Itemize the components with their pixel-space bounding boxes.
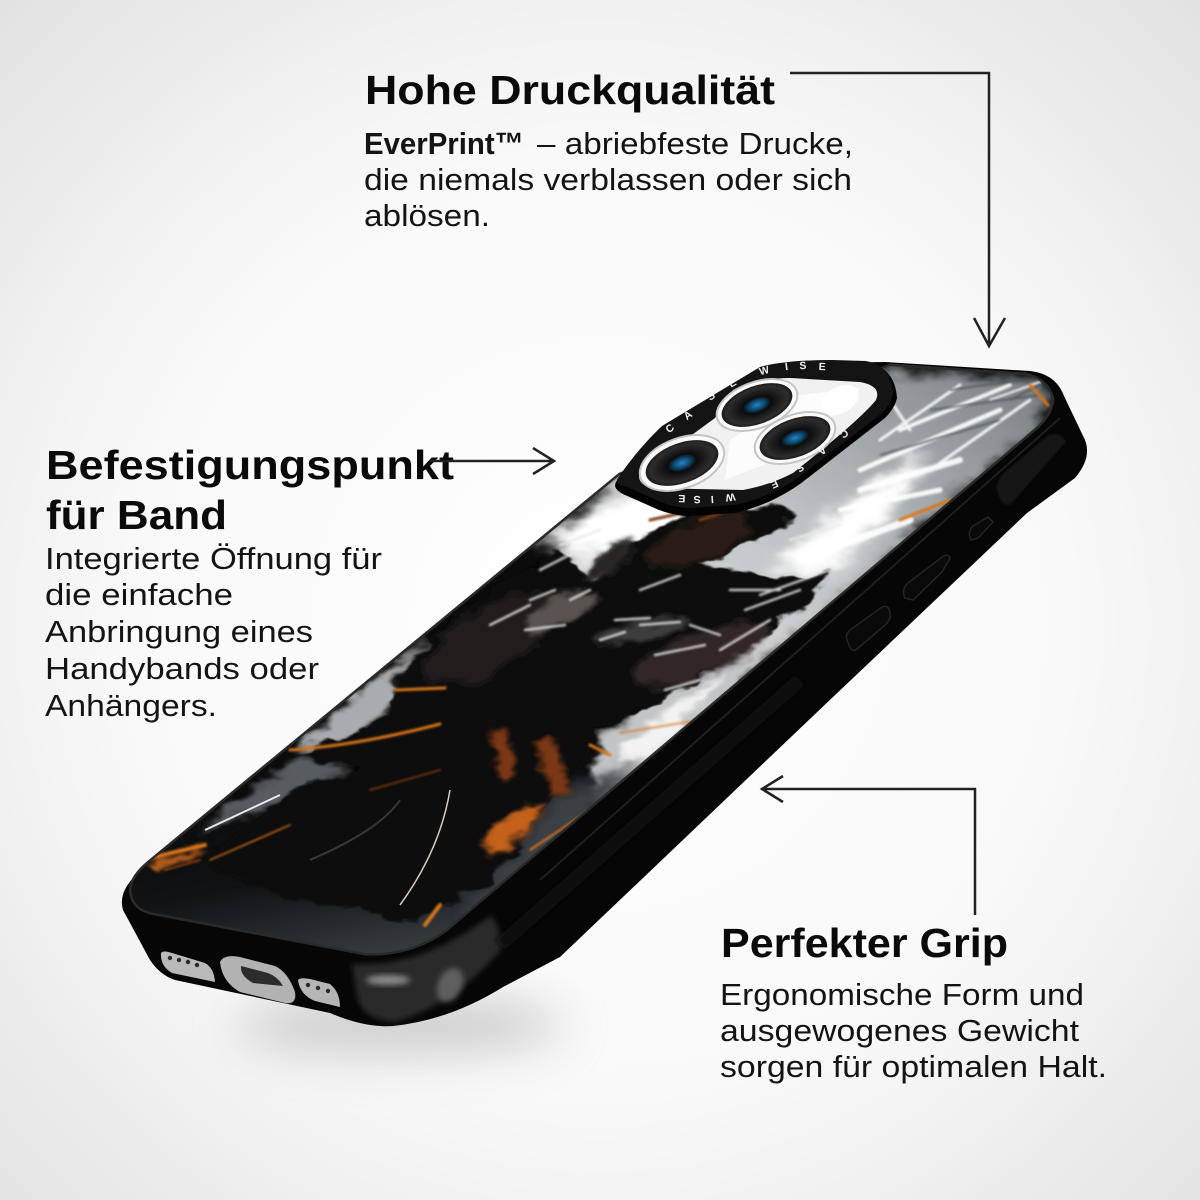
ring lettering: E	[818, 361, 826, 373]
dark figure	[200, 505, 835, 925]
camera ring	[615, 362, 897, 516]
ring lettering: S	[693, 493, 701, 505]
ring lettering: S	[799, 360, 807, 372]
heading: print quality: Hohe Druckqualität	[365, 67, 775, 113]
ring lettering: I	[784, 361, 789, 373]
lens 3	[632, 424, 732, 502]
ring lettering: E	[726, 376, 739, 390]
text: strap attachment description: Anhängers.	[45, 688, 217, 723]
ring lettering: A	[682, 408, 695, 423]
text: print quality description: EverPrint™	[364, 126, 524, 161]
callout: print quality	[364, 67, 853, 233]
text: strap attachment description: Anbringung eines	[45, 614, 313, 649]
ring lettering: I	[710, 493, 714, 505]
callout: strap attachment	[45, 442, 454, 723]
volume up button	[904, 555, 950, 600]
lower right slate	[460, 765, 640, 925]
text: strap attachment description: Integrierte Öffnung für	[45, 541, 382, 576]
heading: strap attachment: für Band	[46, 492, 227, 538]
ring lettering: W	[758, 364, 771, 378]
heading: strap attachment: Befestigungspunkt	[46, 442, 454, 488]
heading: grip: Perfekter Grip	[721, 920, 1008, 966]
arrow: print quality	[790, 73, 1005, 346]
text: grip description: ausgewogenes Gewicht	[720, 1013, 1079, 1048]
wing feathers	[836, 380, 1042, 547]
muscle forms	[420, 511, 774, 694]
power button	[997, 434, 1066, 505]
ring lettering: E	[769, 477, 780, 491]
action button	[969, 517, 993, 540]
ring lettering: W	[725, 490, 736, 504]
text: strap attachment description: die einfache	[45, 577, 233, 612]
rim around screen	[131, 366, 1052, 953]
ring lettering: C	[837, 426, 851, 441]
charging port	[220, 956, 295, 1003]
side buttons	[846, 434, 1066, 650]
ring lettering: A	[815, 443, 829, 458]
artwork base	[131, 366, 1052, 953]
right speaker	[298, 978, 340, 1007]
camera module shine	[725, 388, 860, 480]
orange embers	[150, 385, 1048, 925]
text: grip description	[720, 977, 1107, 1084]
flash	[816, 379, 864, 421]
ring lettering: S	[793, 461, 806, 474]
ring lettering: E	[678, 492, 686, 504]
painted shapes	[150, 370, 1050, 925]
textured grip band	[500, 680, 800, 945]
printed artwork	[131, 366, 1052, 953]
right lower grey sky	[586, 656, 748, 802]
ring lettering: C	[663, 421, 677, 436]
ring lettering	[663, 360, 851, 505]
cape orange masses	[150, 728, 572, 872]
volume down button	[846, 606, 890, 650]
feather shadows	[879, 380, 1040, 457]
ring lettering: S	[705, 390, 718, 403]
bumper corner reflection	[352, 915, 505, 1022]
muscle highlights	[490, 525, 840, 690]
lens 1	[710, 369, 804, 441]
cape lines	[205, 790, 450, 905]
phone shadow	[235, 995, 565, 1055]
lens 2	[748, 402, 842, 474]
case body	[122, 362, 1087, 1026]
left speaker	[161, 952, 215, 982]
text: print quality description	[364, 126, 853, 233]
camera ring top face	[617, 360, 893, 508]
text: grip description: Ergonomische Form und	[720, 977, 1084, 1012]
heading: strap attachment	[46, 442, 454, 538]
text: print quality description: die niemals verblassen oder sich	[364, 162, 852, 197]
text: print quality description: ablösen.	[364, 198, 490, 233]
white glow	[530, 450, 930, 575]
callout: grip	[720, 920, 1107, 1084]
text: strap attachment description	[45, 541, 382, 723]
grey sweep left of cape	[195, 755, 355, 832]
arrow: strap attachment	[430, 448, 554, 474]
arrow: grip	[762, 776, 975, 915]
text: print quality description: – abriebfeste Drucke,	[537, 126, 853, 161]
camera window	[639, 378, 877, 490]
text: strap attachment description: Handybands oder	[45, 651, 319, 686]
phone case	[122, 360, 1087, 1026]
left grey sky	[290, 635, 430, 750]
side band highlight	[540, 418, 1060, 880]
camera bump	[615, 360, 897, 516]
text: grip description: sorgen für optimalen Halt.	[720, 1049, 1107, 1084]
white wing area	[560, 370, 1050, 740]
